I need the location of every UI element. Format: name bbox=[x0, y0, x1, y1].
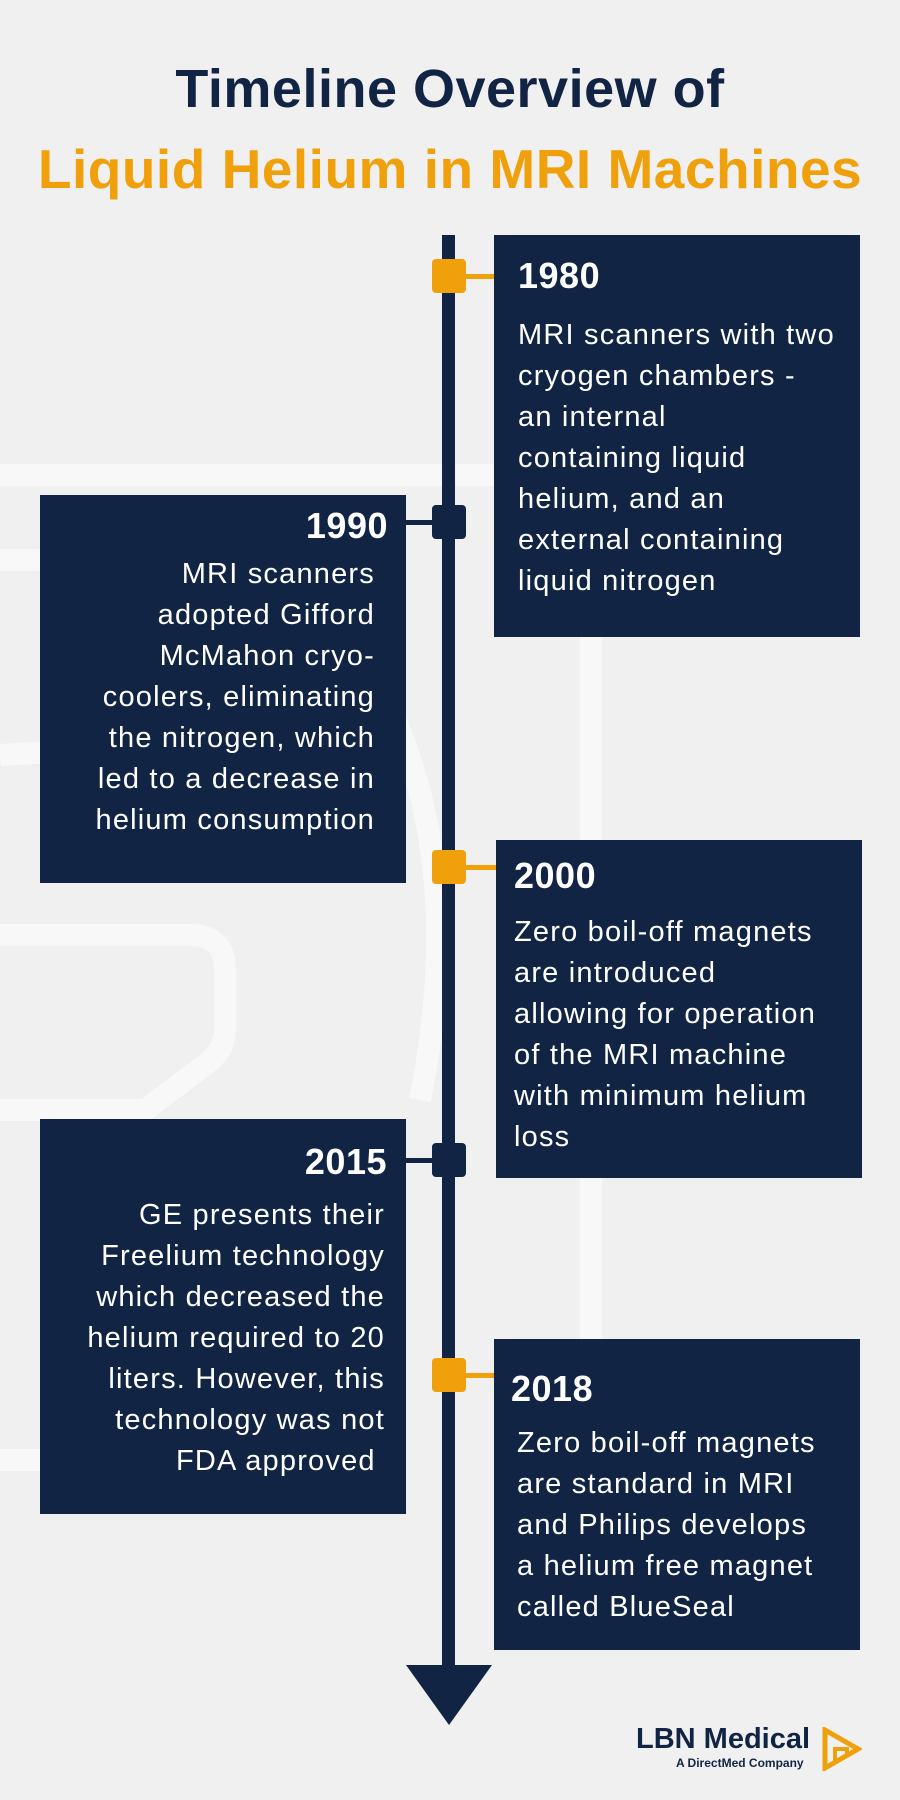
panel: 2015: FDA approved bbox=[176, 1445, 376, 1477]
panel: 1990: McMahon cryo- bbox=[160, 640, 375, 672]
panel: 2015: 2015 bbox=[305, 1141, 387, 1182]
panel: 1990: adopted Gifford bbox=[158, 599, 375, 631]
panel: 2015 bbox=[40, 1119, 406, 1514]
connector 2015 bbox=[406, 1143, 466, 1177]
panel: 2000: are introduced bbox=[514, 957, 716, 989]
panel: 1990: coolers, eliminating bbox=[103, 681, 375, 713]
panel: 1980: containing liquid bbox=[518, 442, 746, 474]
connector 1990 bbox=[406, 505, 466, 539]
panel: 2018: a helium free magnet bbox=[517, 1550, 813, 1582]
panel: 2015: Freelium technology bbox=[101, 1240, 385, 1272]
panel: 1990: helium consumption bbox=[95, 804, 375, 836]
panel: 2015: helium required to 20 bbox=[87, 1322, 385, 1354]
logo: LBN Medical bbox=[636, 1723, 810, 1755]
icon: logo triangle bbox=[822, 1727, 862, 1771]
panel: 2000: loss bbox=[514, 1121, 570, 1153]
panel: 1980: helium, and an bbox=[518, 483, 725, 515]
panel: 2000: allowing for operation bbox=[514, 998, 816, 1030]
panel: 1980: 1980 bbox=[518, 255, 600, 296]
panel: 1990: MRI scanners bbox=[182, 558, 375, 590]
panel: 1990 bbox=[40, 495, 406, 883]
title bbox=[38, 59, 862, 200]
panel: 2018: 2018 bbox=[511, 1368, 593, 1409]
connector 1980 bbox=[432, 259, 494, 293]
connector 2000 bbox=[432, 850, 496, 884]
logo bbox=[636, 1723, 862, 1771]
panel: 2000: with minimum helium bbox=[514, 1080, 808, 1112]
panel: 1980: liquid nitrogen bbox=[518, 565, 717, 597]
panel: 1980: an internal bbox=[518, 401, 667, 433]
panel: 1990: 1990 bbox=[306, 505, 388, 546]
panel: 2015: technology was not bbox=[115, 1404, 385, 1436]
panel: 2000 bbox=[496, 840, 862, 1178]
panel: 1980 bbox=[494, 235, 860, 637]
panel: 2018 bbox=[494, 1339, 860, 1650]
panel: 1980: external containing bbox=[518, 524, 784, 556]
panel: 2000: Zero boil-off magnets bbox=[514, 916, 813, 948]
panel: 2018: and Philips develops bbox=[517, 1509, 807, 1541]
panel: 2018: called BlueSeal bbox=[517, 1591, 735, 1623]
panel: 2015: which decreased the bbox=[96, 1281, 385, 1313]
panel: 1990: the nitrogen, which bbox=[109, 722, 375, 754]
panel: 2018: are standard in MRI bbox=[517, 1468, 794, 1500]
panel: 1980: cryogen chambers - bbox=[518, 360, 796, 392]
title: Timeline Overview of bbox=[175, 59, 725, 119]
logo: A DirectMed Company bbox=[676, 1756, 804, 1770]
panel: 1990: led to a decrease in bbox=[98, 763, 375, 795]
connector 2018 bbox=[432, 1358, 494, 1392]
panel: 2015: GE presents their bbox=[139, 1199, 385, 1231]
panel: 2000: 2000 bbox=[514, 855, 596, 896]
panel: 1980: MRI scanners with two bbox=[518, 319, 835, 351]
panel: 2000: of the MRI machine bbox=[514, 1039, 787, 1071]
panel: 2018: Zero boil-off magnets bbox=[517, 1427, 816, 1459]
panel: 2015: liters. However, this bbox=[108, 1363, 385, 1395]
title: Liquid Helium in MRI Machines bbox=[38, 138, 862, 200]
